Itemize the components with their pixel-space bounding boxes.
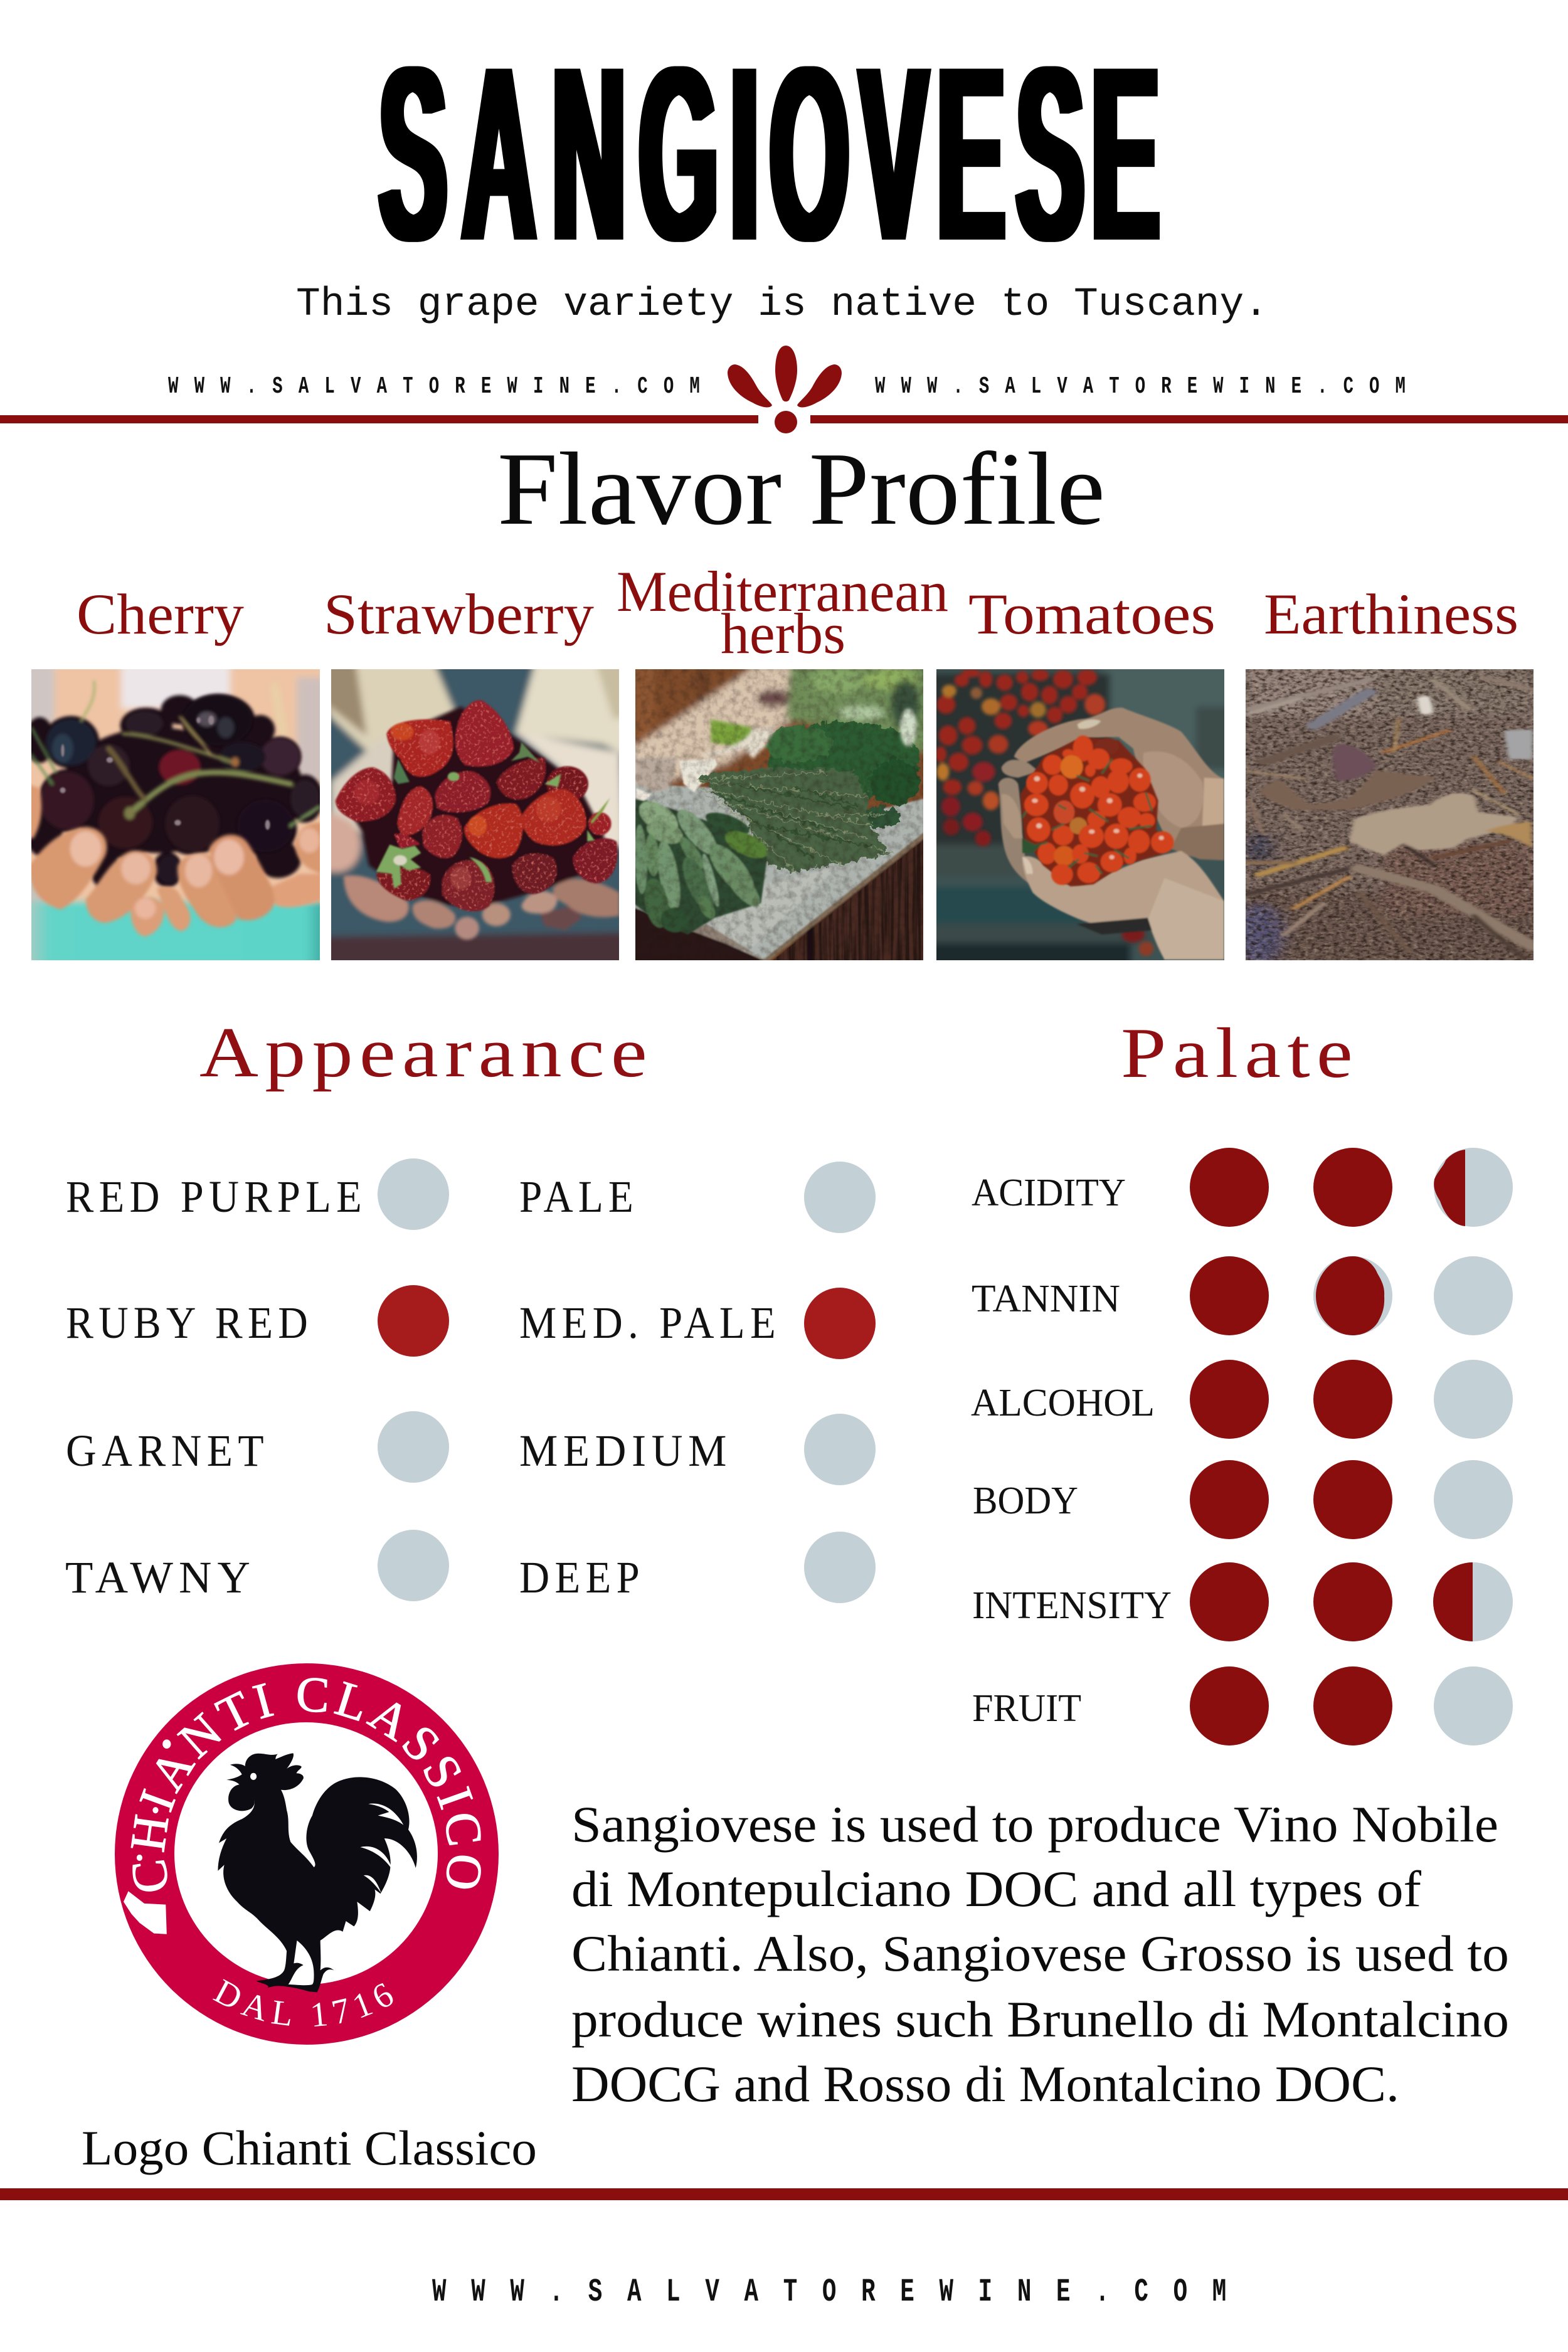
rating dots: body [1190, 1460, 1513, 1539]
heading: appearance: Appearance [199, 1012, 654, 1092]
palate labels: FRUIT [972, 1687, 1081, 1730]
intensity labels: DEEP [519, 1552, 645, 1602]
subtitle: This grape variety is native to Tuscany. [296, 282, 1268, 327]
palate ratings [971, 1148, 1513, 1745]
rating dots: acidity [1190, 1148, 1513, 1227]
colour labels: RUBY RED [66, 1298, 313, 1348]
logo: chianti classico [115, 1663, 499, 2045]
photo: cherries [31, 669, 320, 960]
intensity dots [804, 1162, 876, 1603]
footer rule [0, 2188, 1568, 2200]
icon: tuscany shape [124, 1739, 171, 1934]
colour labels: TAWNY [65, 1552, 256, 1602]
flavor labels: Strawberry [324, 582, 594, 646]
appearance colour scale [65, 1158, 449, 1602]
heading: palate: Palate [1121, 1013, 1359, 1093]
colour labels [65, 1172, 367, 1602]
flavor labels: Mediterranean [617, 559, 948, 623]
rating dots: alcohol [1190, 1360, 1513, 1439]
flavor labels [77, 559, 1518, 665]
photo: forest floor earth [1246, 669, 1534, 960]
palate labels [971, 1172, 1172, 1730]
header rule [0, 415, 1568, 423]
flavor labels: Tomatoes [968, 582, 1216, 646]
flavor labels: Cherry [77, 582, 244, 646]
intensity labels: MED. PALE [519, 1298, 781, 1348]
palate labels: TANNIN [972, 1278, 1120, 1320]
paragraph: description: Sangiovese is used to produce Vino Nobile [571, 1796, 1498, 1853]
title: SANGIOVESE [379, 16, 1159, 293]
photo: mediterranean herbs [635, 669, 923, 960]
paragraph: description: DOCG and Rosso di Montalcino DOC. [571, 2055, 1399, 2112]
heading: flavor profile: Flavor Profile [497, 431, 1105, 546]
colour dots [378, 1158, 449, 1601]
intensity labels: MEDIUM [519, 1426, 732, 1476]
icon: flourish [728, 346, 842, 433]
intensity labels: PALE [519, 1172, 638, 1222]
appearance intensity scale [519, 1162, 876, 1603]
flavor labels: herbs [721, 601, 845, 665]
intensity labels [519, 1172, 781, 1602]
paragraph: description: Chianti. Also, Sangiovese Grosso is used to [571, 1925, 1509, 1982]
palate labels: BODY [973, 1480, 1078, 1522]
logo caption: Logo Chianti Classico [82, 2121, 537, 2175]
paragraph: description [571, 1796, 1509, 2112]
palate labels: ACIDITY [972, 1172, 1126, 1214]
logo date text: DAL 1716 [213, 1979, 393, 2026]
rating dots: tannin [1190, 1256, 1513, 1335]
paragraph: description: produce wines such Brunello di Montalcino [571, 1991, 1509, 2048]
icon: black rooster [218, 1753, 417, 1992]
palate labels: INTENSITY [972, 1584, 1172, 1627]
paragraph: description: di Montepulciano DOC and all types of [571, 1860, 1422, 1917]
footer website link: WWW.SALVATOREWINE.COM [432, 2274, 1251, 2311]
colour labels: RED PURPLE [66, 1172, 367, 1222]
rating dots: fruit [1190, 1666, 1513, 1745]
photo: strawberries [331, 669, 619, 960]
website link left: WWW.SALVATOREWINE.COM [168, 373, 716, 400]
colour labels: GARNET [66, 1426, 269, 1476]
photo: cherry tomatoes in hands [936, 669, 1224, 960]
logo ring text: CHIANTI CLASSICO [130, 1678, 481, 1892]
rating dots: intensity [1190, 1562, 1513, 1641]
flavor labels: Earthiness [1264, 582, 1518, 646]
palate labels: ALCOHOL [971, 1382, 1155, 1424]
